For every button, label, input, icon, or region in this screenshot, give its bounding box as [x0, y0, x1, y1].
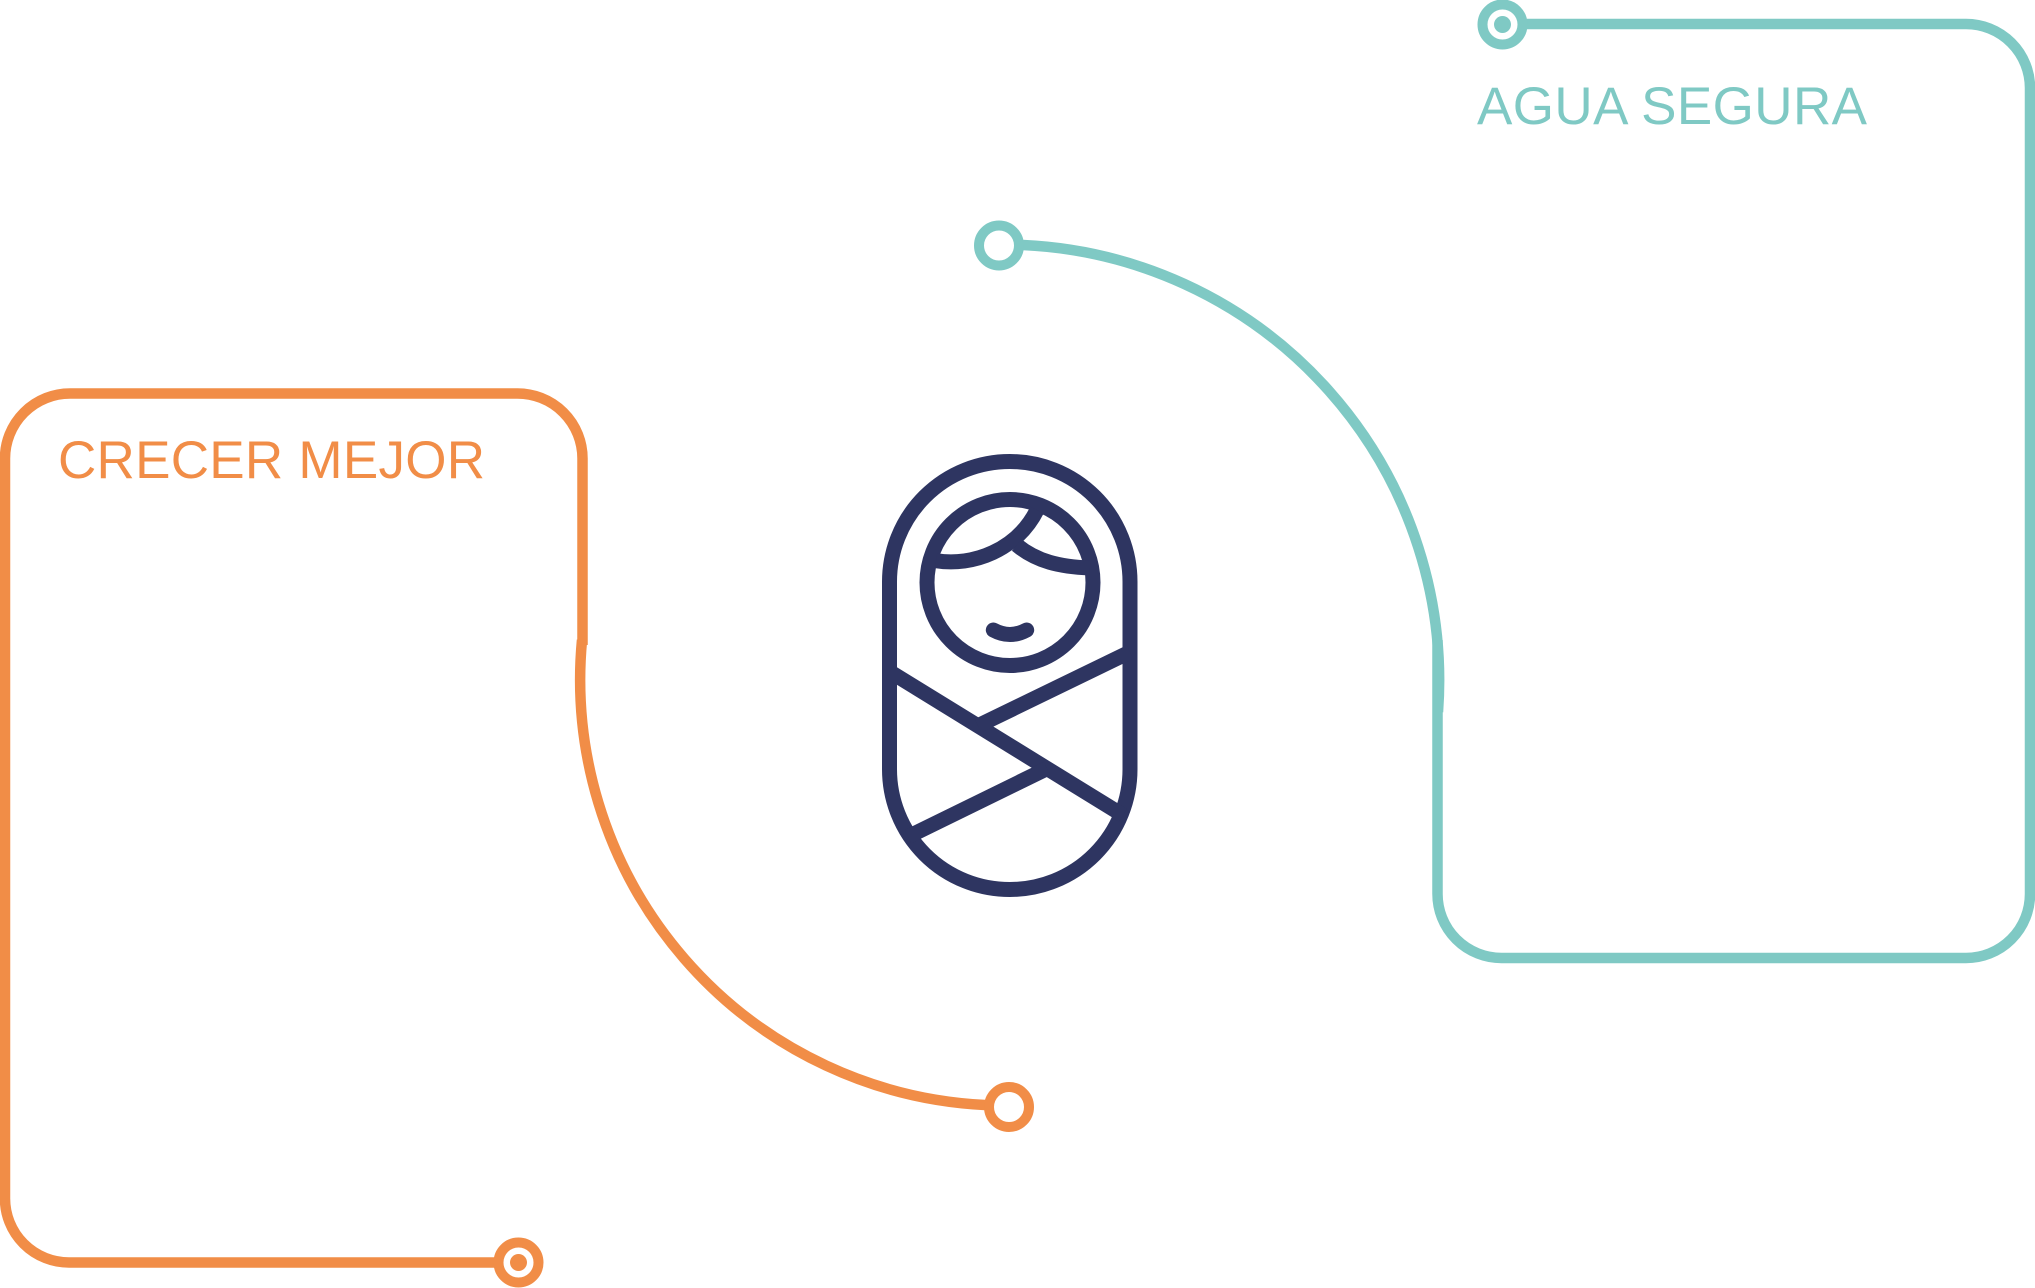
mouth: [993, 630, 1027, 634]
baby head: [927, 500, 1093, 666]
icon: orange start node with dot: [498, 1242, 538, 1282]
heading: agua segura: AGUA SEGURA: [1477, 77, 1868, 136]
icon: teal start node with dot: [1482, 4, 1522, 44]
icon: swaddled baby: [890, 462, 1130, 890]
hair: [936, 510, 1090, 568]
heading: crecer mejor: CRECER MEJOR: [58, 431, 485, 490]
swaddle outline: [890, 462, 1130, 890]
icon: orange end node: [989, 1087, 1029, 1127]
teal connector path: agua segura: [1023, 24, 2030, 958]
swaddle wraps: [890, 652, 1130, 837]
icon: teal end node: [979, 226, 1019, 266]
orange connector path: crecer mejor: [5, 393, 985, 1263]
